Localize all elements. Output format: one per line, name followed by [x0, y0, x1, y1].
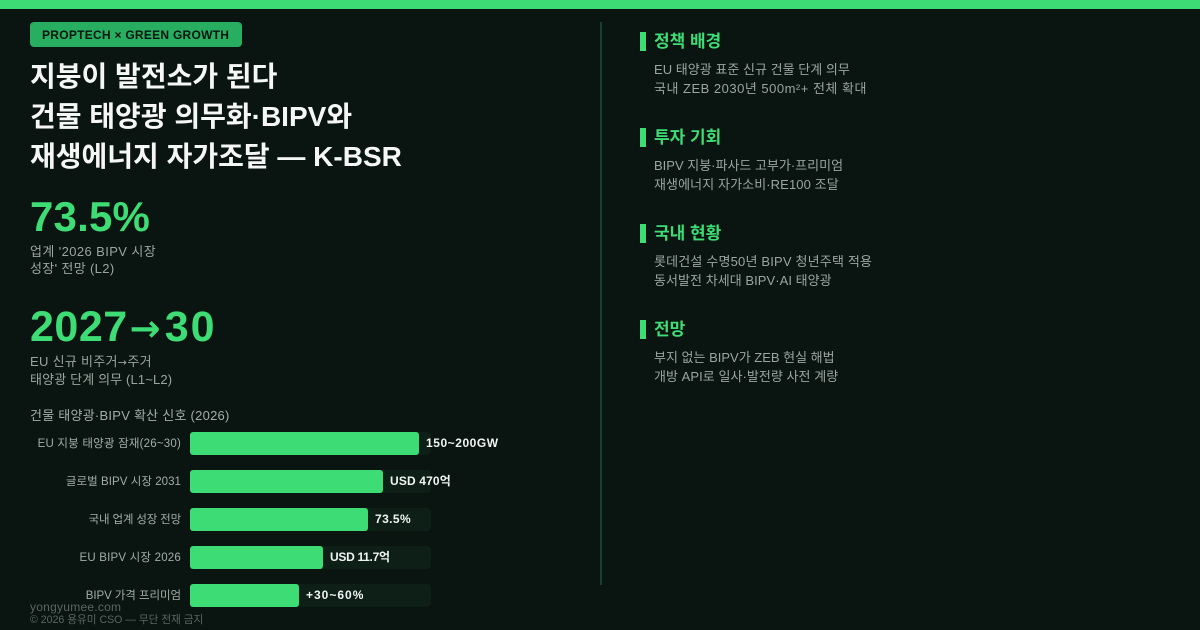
body: 국내 ZEB 2030년 500m²+ 전체 확대: [654, 81, 867, 96]
section: policy: [640, 32, 867, 96]
body: [654, 62, 867, 96]
label: global BIPV: 글로벌 BIPV 시장 2031: [66, 476, 181, 488]
body: [654, 158, 843, 192]
stat caption: EU mandate: EU 신규 비주거→주거: [30, 354, 152, 369]
bar 5: [190, 584, 299, 607]
top accent bar: [0, 0, 1200, 9]
tag pill: [30, 22, 242, 47]
stat: 73.5%: 73.5%: [30, 193, 150, 240]
bar 3: [190, 508, 368, 531]
stat caption: market outlook: 성장' 전망 (L2): [30, 261, 115, 276]
stat caption: market outlook: [30, 244, 156, 276]
body: 개방 API로 일사·발전량 사전 계량: [654, 369, 838, 384]
footer copyright: © 2026 용유미 CSO — 무단 전재 금지: [30, 614, 203, 626]
title: 건물 태양광 의무화·BIPV와: [30, 101, 352, 132]
value 5: +30~60%: [306, 588, 364, 602]
label: domestic growth: 국내 업계 성장 전망: [89, 514, 181, 526]
label: EU BIPV: EU BIPV 시장 2026: [79, 552, 181, 564]
stat caption: market outlook: 업계 '2026 BIPV 시장: [30, 244, 156, 259]
track 2: [190, 470, 431, 493]
marker: [640, 32, 646, 51]
body: 롯데건설 수명50년 BIPV 청년주택 적용: [654, 254, 872, 268]
value 1: 150~200GW: [426, 436, 499, 450]
value 2: USD 470억: [390, 474, 451, 488]
body: 부지 없는 BIPV가 ZEB 현실 해법: [654, 350, 835, 364]
body: BIPV 지붕·파사드 고부가·프리미엄: [654, 158, 843, 172]
title: [30, 61, 402, 172]
column divider: [600, 22, 602, 585]
bar chart heading: 건물 태양광·BIPV 확산 신호 (2026): [30, 408, 230, 423]
marker: [640, 128, 646, 147]
bar 4: [190, 546, 323, 569]
body: [654, 254, 872, 288]
body: [654, 350, 838, 384]
stat caption: EU mandate: [30, 354, 172, 387]
track 3: [190, 508, 431, 531]
bar chart: [38, 432, 499, 607]
body: 재생에너지 자가소비·RE100 조달: [654, 177, 839, 192]
heading: 투자 기회: [654, 128, 721, 147]
marker: [640, 320, 646, 339]
marker: [640, 224, 646, 243]
bar 2: [190, 470, 383, 493]
value 4: USD 11.7억: [330, 550, 390, 564]
label: price premium: BIPV 가격 프리미엄: [86, 590, 181, 602]
track 5: [190, 584, 431, 607]
track 1: [190, 432, 431, 455]
track 4: [190, 546, 431, 569]
stat: 2027→30: 2027→30: [30, 303, 217, 351]
body: EU 태양광 표준 신규 건물 단계 의무: [654, 62, 850, 76]
value 3: 73.5%: [375, 512, 411, 526]
heading: 정책 배경: [654, 32, 721, 51]
body: 동서발전 차세대 BIPV·AI 태양광: [654, 273, 832, 288]
tag pill: PROPTECH × GREEN GROWTH: [42, 28, 229, 42]
heading: 전망: [654, 320, 685, 339]
section: investment: [640, 128, 843, 192]
section: domestic: [640, 224, 872, 288]
label: EU rooftop: EU 지붕 태양광 잠재(26~30): [38, 438, 181, 450]
footer site: yongyumee.com: [30, 600, 121, 614]
title: 지붕이 발전소가 된다: [30, 61, 277, 92]
title: 재생에너지 자가조달 — K-BSR: [30, 141, 402, 172]
section: outlook: [640, 320, 838, 384]
stat caption: EU mandate: 태양광 단계 의무 (L1~L2): [30, 372, 172, 387]
bar 1: [190, 432, 419, 455]
heading: 국내 현황: [654, 224, 721, 243]
